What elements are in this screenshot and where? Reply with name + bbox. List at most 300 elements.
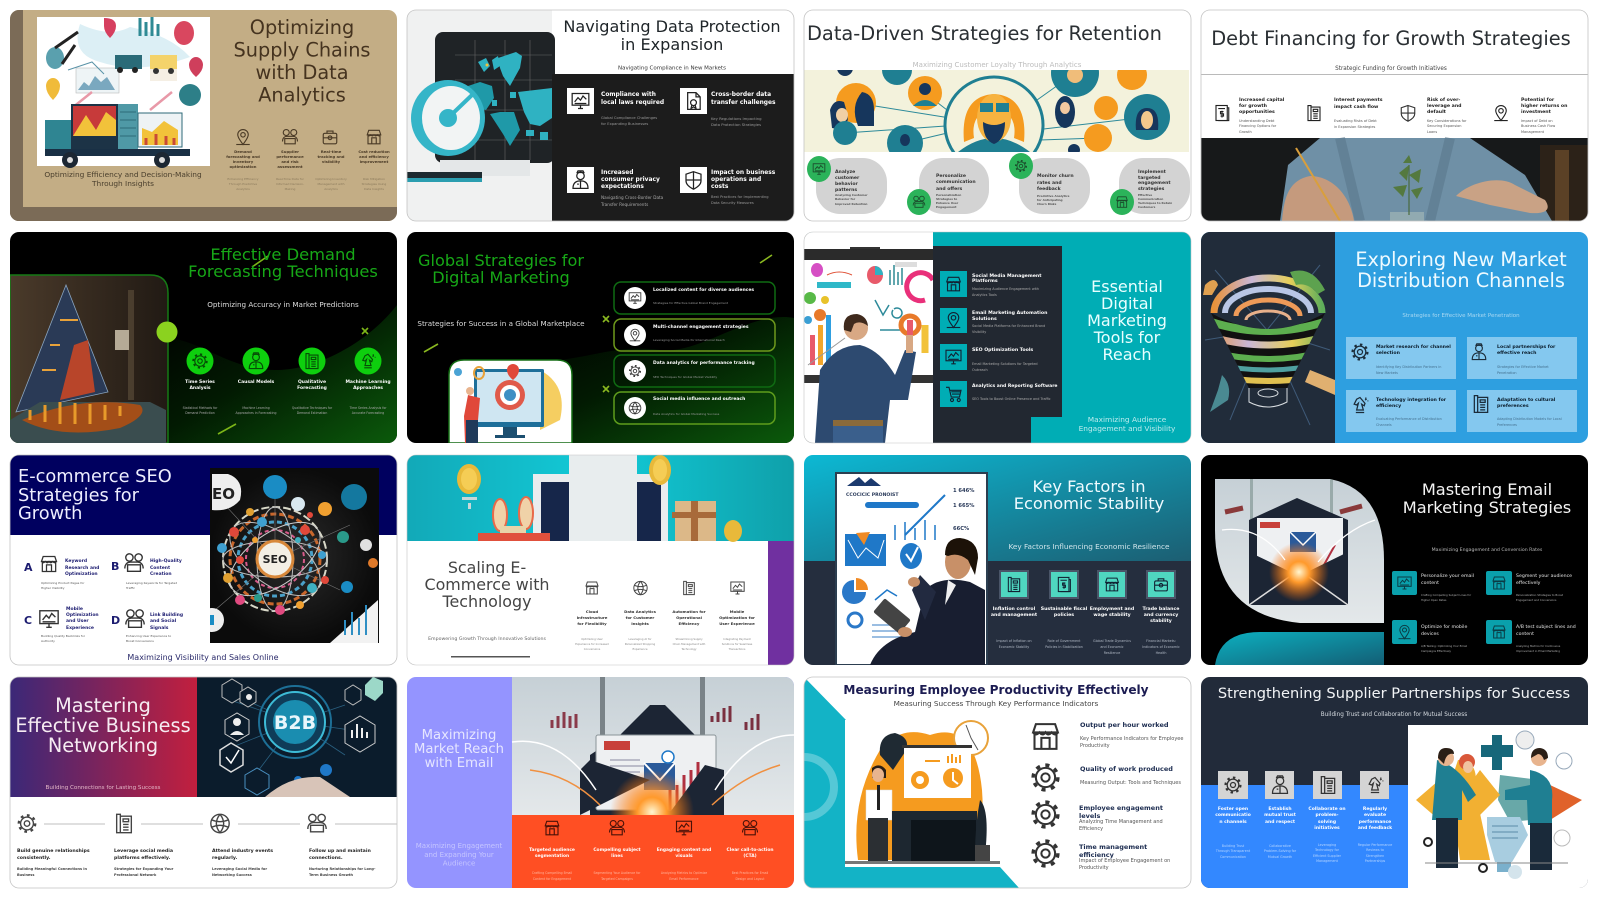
item: machine learning: Approaches	[353, 385, 383, 391]
factor: trade balance: Indicators of Economic	[1142, 645, 1180, 649]
box: cultural adaptation: Adapting Distribution Models for Local	[1497, 417, 1562, 421]
EO badge text: EO	[212, 485, 235, 503]
item: engaging content	[657, 821, 711, 881]
item: business impact: operations and	[711, 177, 761, 183]
item: real-time tracking: Management with	[317, 182, 345, 186]
tool: SEO optimization	[940, 344, 1038, 372]
item: over-leverage risk: Risk of over-	[1427, 97, 1460, 103]
dark content panel	[552, 74, 794, 221]
item: audience segmentation: segmentation	[535, 853, 569, 859]
step: implement: targeted	[1138, 175, 1161, 181]
item: mobile: Campaigns Effectively	[1421, 649, 1451, 653]
item: time series: Analysis	[189, 385, 211, 391]
title: Measuring Employee Productivity Effectively	[843, 683, 1149, 697]
item: business impact: costs	[711, 184, 729, 190]
step: monitor churn	[1009, 153, 1090, 214]
item: increased capital: Understanding Debt	[1239, 119, 1275, 123]
item: real-time tracking	[315, 131, 347, 191]
item: personalize: Personalize your email	[1421, 573, 1474, 579]
factor: fiscal policies: Policies in Stabilization	[1045, 645, 1083, 649]
item A: Research and	[65, 565, 99, 571]
factor: trade balance: Health	[1156, 651, 1166, 655]
card border	[10, 455, 397, 665]
item: segment: Personalization Strategies to Boost	[1516, 593, 1563, 597]
item: real-time tracking: tracking and	[317, 154, 345, 159]
item: supplier performance: Making	[285, 187, 295, 191]
step: personalize: Personalize	[936, 173, 966, 179]
box: technology integration: efficiency	[1376, 403, 1401, 409]
step: monitor churn: rates and	[1037, 180, 1062, 186]
item: over-leverage risk: Loans	[1427, 130, 1437, 134]
subtitle: Strategies for Success in a Global Marketplace	[417, 319, 585, 328]
panel: Essential Digital Marketing Tools	[804, 232, 1191, 443]
metric: output per hour: Productivity	[1080, 743, 1110, 749]
item: cross-border: transfer challenges	[711, 100, 776, 106]
row: multi-channel	[614, 319, 775, 351]
item: cloud infrastructure: Experience for Increased	[575, 642, 609, 646]
title: Networking	[48, 734, 158, 757]
row: social media	[614, 392, 775, 424]
item: increased capital: for growth	[1239, 103, 1267, 109]
subtitle: Empowering Growth Through Innovative Solutions	[428, 636, 546, 642]
title: Strengthening Supplier Partnerships for Success	[1218, 685, 1570, 702]
step: collaborate: Collaborate on	[1308, 806, 1346, 812]
light arc accent	[774, 757, 834, 817]
item: data analytics: Personalized Shopping	[625, 642, 655, 646]
step: collaborate: Efficient Supplier	[1313, 854, 1342, 858]
title: with Data	[255, 61, 349, 84]
step: follow up	[308, 814, 376, 877]
step: evaluate: Strengthen	[1366, 854, 1384, 858]
item: call to action: (CTA)	[743, 853, 757, 859]
step: evaluate: performance	[1359, 819, 1391, 825]
title: Economic Stability	[1014, 494, 1165, 513]
item: cost reduction	[358, 130, 390, 191]
factor: fiscal policies: Role of Government	[1048, 639, 1081, 643]
row: localized content: Strategies for Effective Global Brand Engagement	[653, 301, 729, 305]
item: supplier performance: and risk	[281, 159, 299, 164]
item: cost reduction: Strategies Using	[362, 182, 386, 186]
item: cloud infrastructure: Optimizing User	[581, 637, 604, 641]
item: mobile optimization	[719, 582, 755, 651]
step: mutual trust: Establish	[1268, 806, 1292, 812]
item A: Optimizing Product Pages for	[41, 581, 85, 585]
accent: lime strokes	[424, 255, 772, 392]
factor: inflation: Impact of Inflation on	[996, 639, 1032, 643]
item: personalize: Crafting Compelling Subject Lines for	[1421, 593, 1472, 597]
step: mutual trust: mutual trust	[1264, 812, 1297, 818]
title: Data-Driven Strategies for Retention	[807, 22, 1162, 45]
item: machine learning: Machine Learning	[345, 379, 391, 385]
title: Distribution Channels	[1357, 269, 1565, 292]
item: mobile	[1392, 620, 1467, 653]
step: personalize: Strategies to	[936, 197, 957, 201]
item D: Link Building	[150, 612, 183, 618]
item: increased capital	[1216, 97, 1285, 134]
item D	[111, 610, 183, 643]
item: causal models: Approaches in Forecasting	[236, 411, 276, 415]
title: Digital	[1101, 294, 1153, 313]
step: personalize: Engagement	[936, 205, 957, 209]
title: Technology	[441, 592, 532, 611]
step: open communication: Building Trust	[1222, 844, 1245, 848]
factor: employment: Employment and	[1090, 606, 1134, 612]
tool: SEO optimization: SEO Optimization Tools	[972, 347, 1033, 353]
step: collaborate: Management	[1316, 859, 1339, 863]
tool: email automation: Social Media Platforms for Enhanced Brand	[972, 324, 1045, 328]
subtitle: Maximizing Engagement	[416, 842, 503, 850]
illustration: marketing target screen	[449, 360, 572, 443]
item: demand forecasting: forecasting and	[226, 154, 260, 159]
step: industry events: Networking Success	[212, 873, 252, 877]
item: qualitative forecasting	[292, 348, 333, 415]
item D: and Social	[150, 618, 177, 624]
item: mobile optimization: Mobile	[730, 609, 745, 614]
item C: Optimization	[66, 612, 99, 618]
panel: Debt Financing	[1201, 10, 1588, 221]
item: causal models	[236, 348, 276, 415]
box: local partnerships: effective reach	[1497, 350, 1536, 356]
panel: Exploring New Market Distribution	[1201, 232, 1588, 443]
item: interest payments	[1308, 97, 1383, 129]
item: data analytics: for Customer	[626, 615, 654, 620]
metric: employee engagement: Efficiency	[1079, 826, 1103, 832]
metric: time management	[1033, 841, 1170, 871]
item: machine learning: Accurate Forecasting	[352, 411, 384, 415]
illustration: teal e-commerce scene	[407, 455, 794, 542]
item: mobile optimization: Solutions for Seamless	[722, 642, 753, 646]
item: data analytics: Leveraging AI for	[628, 637, 652, 641]
item: increased capital: Financing Options for	[1239, 124, 1277, 128]
title: in Expansion	[621, 35, 723, 54]
tool: email automation: Visibility	[972, 330, 986, 334]
item: data analytics: Insights	[631, 621, 649, 626]
item: engaging content: visuals	[675, 853, 693, 859]
box: market research: selection	[1376, 350, 1400, 356]
B2B label: B2B	[274, 712, 316, 734]
item: demand forecasting: Demand	[234, 149, 252, 154]
tool: email automation: Solutions	[972, 316, 997, 322]
item: cost reduction: Cost reduction	[358, 149, 390, 154]
step: analyze: patterns	[835, 187, 857, 193]
purple side bar	[768, 541, 794, 665]
title: Effective Business	[15, 714, 191, 737]
step: social media platforms: platforms effectively.	[114, 855, 170, 861]
item C: Authority	[41, 639, 55, 643]
item C	[24, 606, 99, 643]
item: automation: Technology	[680, 647, 697, 651]
card border	[804, 232, 1191, 443]
panel: Maximizing Market Reach with Email	[407, 677, 794, 888]
divider	[1201, 74, 1588, 75]
box: cultural adaptation	[1467, 390, 1577, 432]
chart labels on board: CCOCICIC PRONOIST	[846, 492, 899, 498]
title: Supply Chains	[234, 38, 370, 62]
item B	[111, 554, 182, 590]
item: subject lines	[593, 820, 641, 881]
step: implement: Customers	[1138, 205, 1156, 209]
step: mutual trust	[1264, 771, 1297, 859]
panel: Mastering Email Marketing	[1201, 455, 1588, 665]
factor: employment: Global Trade Dynamics	[1093, 639, 1131, 643]
illustration: customer network	[804, 70, 1189, 152]
panel: Mastering Business Networking	[10, 677, 397, 888]
step: genuine relationships: Build genuine relationships	[17, 848, 90, 854]
item: cloud infrastructure: for Flexibility	[577, 621, 607, 626]
title: Mastering	[55, 694, 151, 717]
item: call to action: Clear call-to-action	[726, 847, 774, 853]
tool: email automation	[940, 308, 1047, 334]
title: Digital Marketing	[432, 268, 570, 287]
metric: employee engagement	[1033, 802, 1163, 832]
metric: time management: Impact of Employee Engagement on	[1079, 858, 1170, 864]
item A: Keyword	[65, 558, 87, 564]
tool: email automation: Email Marketing Automation	[972, 310, 1047, 316]
item: privacy: Navigating Cross-Border Data	[601, 195, 664, 200]
item: cost reduction: Risk Mitigation	[363, 177, 385, 181]
item: automation: Automation for	[672, 609, 706, 614]
item: audience segmentation	[529, 821, 575, 881]
step: genuine relationships	[17, 815, 90, 877]
step: industry events: regularly.	[212, 855, 237, 861]
item: qualitative forecasting: Demand Estimation	[297, 411, 327, 415]
red-purple header block	[10, 677, 197, 797]
item: increased capital: Growth	[1239, 130, 1252, 134]
factor: inflation: Economic Stability	[999, 645, 1029, 649]
accent: lime strokes	[218, 256, 368, 434]
title: Mastering Email	[1422, 480, 1552, 499]
subtitle: Navigating Compliance in New Markets	[618, 66, 726, 72]
item: real-time tracking: Real-time	[321, 149, 342, 154]
item: engaging content: Analyzing Metrics to Optimize	[661, 871, 707, 875]
illustration: colorful funnel	[1201, 232, 1335, 443]
item: engaging content: Email Performance	[669, 877, 699, 881]
illustration: presenter at whiteboard	[804, 232, 933, 443]
box: local partnerships: Penetration	[1497, 371, 1517, 375]
box: market research: Identifying Key Distribution Partners in	[1376, 365, 1441, 369]
item: higher returns: Management	[1521, 130, 1545, 134]
step: genuine relationships: consistently.	[17, 855, 51, 861]
metric: employee engagement: Employee engagement	[1079, 804, 1163, 812]
step: collaborate: problem-	[1316, 812, 1339, 818]
title: Growth	[18, 503, 82, 524]
subtitle: Audience	[443, 860, 475, 868]
step: evaluate: evaluate	[1364, 812, 1386, 818]
item: call to action: Best Practices for Email	[732, 871, 768, 875]
item: compliance	[567, 88, 664, 126]
subtitle: Maximizing Audience	[1088, 415, 1167, 424]
item: supplier performance: performance	[276, 154, 304, 159]
tool: social media management: Platforms	[972, 278, 998, 284]
illustration: glowing envelope	[1215, 479, 1384, 623]
background wave	[168, 305, 397, 443]
box: cultural adaptation: Preferences	[1497, 423, 1517, 427]
step: follow up: connections.	[309, 855, 343, 861]
subtitle: Optimizing Accuracy in Market Predictions	[207, 300, 359, 309]
item D: D	[111, 614, 120, 627]
item B: Traffic	[125, 586, 135, 590]
metric: quality of work	[1033, 765, 1181, 790]
item: cloud infrastructure: Cloud	[586, 609, 598, 614]
step: mutual trust: and respect	[1265, 819, 1296, 825]
item B: Content	[150, 565, 171, 571]
step: follow up: Follow up and maintain	[309, 848, 371, 854]
item: segment: Engagement and Conversions	[1516, 598, 1557, 602]
factor: trade balance: and currency	[1144, 612, 1178, 618]
item: machine learning: Time Series Analysis for	[348, 406, 387, 410]
item C: and User	[66, 618, 89, 624]
item: privacy: Transfer Requirements	[600, 202, 648, 207]
title: E-commerce SEO	[18, 466, 172, 487]
tool: social media management: Analytics Tools	[972, 293, 997, 297]
item B: Creation	[150, 571, 172, 577]
item: demand forecasting	[226, 130, 260, 191]
subtitle: Measuring Success Through Key Performance Indicators	[894, 699, 1099, 708]
panel: Strengthening Supplier Partnerships	[1201, 677, 1588, 888]
item: business impact: Best Practices for Implementing	[711, 195, 769, 199]
row: localized content: Localized content for diverse audiences	[653, 287, 754, 293]
step: collaborate: initiatives	[1314, 825, 1340, 831]
item: personalize	[1392, 571, 1474, 602]
item: real-time tracking: Analytics	[324, 187, 338, 191]
chart labels on board: 1 665%	[953, 503, 975, 509]
illustration: large glowing envelope	[512, 677, 794, 854]
item: call to action: Design and Layout	[736, 877, 765, 881]
item: increased capital: Increased capital	[1239, 97, 1285, 103]
illustration: partners with puzzle	[1408, 725, 1588, 888]
title: with Email	[425, 756, 493, 771]
item: cloud infrastructure: Conversions	[584, 647, 601, 651]
item: automation: Operational	[676, 615, 702, 620]
step: industry events: Attend industry events	[212, 848, 273, 854]
item: time series: Demand Prediction	[185, 411, 215, 415]
panel: Key Factors Economic Stability	[804, 455, 1191, 665]
step: analyze: Analyze	[835, 169, 855, 175]
accent: teal shape	[1215, 632, 1384, 665]
step: social media platforms: Leverage social media	[114, 848, 173, 854]
item: automation	[672, 581, 706, 651]
step: open communication: Through Transparent	[1215, 849, 1251, 853]
step: social media platforms: Strategies for Expanding Your	[114, 867, 174, 871]
item: segment	[1486, 571, 1572, 602]
item B: Leveraging Keywords for Targeted	[126, 581, 177, 585]
item C: Experience	[66, 625, 94, 631]
step: social media platforms: Professional Network	[114, 873, 157, 877]
item: business impact: Data Security Measures	[711, 201, 754, 205]
item: over-leverage risk: Key Considerations for	[1427, 119, 1467, 123]
step: industry events	[211, 814, 273, 877]
factor: trade balance: Trade balance	[1143, 606, 1179, 612]
dark tools panel	[933, 246, 1062, 443]
panel: Measuring Employee Productivity	[774, 677, 1191, 888]
row: data analytics	[614, 355, 775, 387]
title: Effective Demand	[210, 245, 356, 264]
box: cultural adaptation: preferences	[1497, 403, 1529, 409]
step: open communication: communicatio	[1215, 812, 1251, 818]
subtitle: Building Connections for Lasting Success	[46, 785, 161, 791]
panel: Effective Demand Forecasting	[10, 232, 397, 443]
tool: SEO optimization: Outreach	[972, 368, 988, 372]
step: collaborate: Technology for	[1314, 848, 1340, 852]
step: open communication: Foster open	[1218, 806, 1248, 812]
item: data analytics: Data Analytics	[624, 609, 657, 614]
item C: Building Quality Backlinks for	[41, 634, 86, 638]
title: Market Reach	[414, 742, 504, 757]
subtitle: Building Trust and Collaboration for Mutual Success	[1321, 712, 1467, 718]
row: data analytics: Data analytics for performance tracking	[653, 360, 755, 366]
tool: analytics and reporting: SEO Tools to Boost Online Presence and Traffic	[972, 397, 1051, 401]
step: open communication: n channels	[1219, 819, 1247, 825]
item: cross-border: Data Protection Strategies	[711, 122, 761, 127]
accent: lime dot	[156, 322, 178, 342]
card border	[407, 455, 794, 665]
metric: time management: efficiency	[1079, 851, 1115, 859]
card border	[804, 10, 1191, 221]
step: open communication	[1215, 771, 1251, 859]
step: monitor churn: Predictive Analytics	[1037, 194, 1070, 198]
item: cross-border: Cross-border data	[711, 92, 771, 98]
step: personalize: and offers	[936, 186, 963, 192]
caption: Maximizing Visibility and Sales Online	[127, 653, 279, 662]
underline	[451, 656, 530, 658]
illustration: B2B network	[197, 677, 397, 797]
box: technology integration	[1346, 390, 1456, 432]
step: social media platforms	[114, 814, 174, 877]
metric: output per hour: Key Performance Indicators for Employee	[1080, 736, 1183, 742]
title: Optimizing	[250, 16, 354, 39]
item: business impact: Impact on business	[711, 170, 776, 176]
step: evaluate: Regularly	[1363, 806, 1387, 812]
item: over-leverage risk: leverage and	[1427, 103, 1462, 109]
factor: trade balance: stability	[1150, 618, 1172, 624]
tool: social media management: Social Media Management	[972, 273, 1042, 279]
step: implement: strategies	[1138, 186, 1165, 192]
title: Maximizing	[422, 728, 496, 743]
title: Forecasting Techniques	[188, 262, 378, 281]
subtitle: Strategic Funding for Growth Initiatives	[1335, 66, 1447, 72]
tool: analytics and reporting: Analytics and Reporting Software	[972, 383, 1057, 389]
orange content band	[512, 815, 794, 888]
step: personalize: Personalization	[936, 193, 961, 197]
item: call to action	[726, 820, 774, 881]
item: time series: Statistical Methods for	[183, 406, 218, 410]
metric: employee engagement: levels	[1079, 812, 1101, 820]
item: higher returns: Impact of Debt on	[1521, 119, 1553, 123]
panel: Data-Driven Strategies	[804, 25, 1190, 215]
step: evaluate: Partnerships	[1365, 859, 1386, 863]
item: interest payments: impact cash flow	[1334, 104, 1379, 110]
item: business impact	[680, 167, 776, 205]
metric: quality of work: Measuring Output: Tools and Techniques	[1080, 780, 1181, 786]
factor: employment: wage stability	[1093, 612, 1131, 618]
item: privacy: expectations	[601, 184, 644, 190]
item: mobile: A/B Testing: Optimizing Your Email	[1421, 644, 1467, 648]
item: audience segmentation: Targeted audience	[529, 847, 575, 853]
item A	[24, 556, 99, 590]
metric: time management: Time management	[1079, 843, 1147, 851]
card border	[1201, 10, 1588, 221]
background wave	[520, 317, 794, 443]
item: supplier performance	[276, 130, 305, 191]
item: privacy: consumer privacy	[601, 177, 660, 183]
item: increased capital: opportunities	[1239, 109, 1275, 115]
caption: Optimizing Efficiency and Decision-Making	[44, 170, 202, 179]
metric: output per hour: Output per hour worked	[1080, 721, 1169, 729]
step: monitor churn: Churn Risks	[1037, 202, 1057, 206]
step: analyze: Analyzing Customer	[835, 193, 868, 197]
box: technology integration: Technology integration for	[1376, 397, 1447, 403]
item B: B	[111, 560, 119, 573]
